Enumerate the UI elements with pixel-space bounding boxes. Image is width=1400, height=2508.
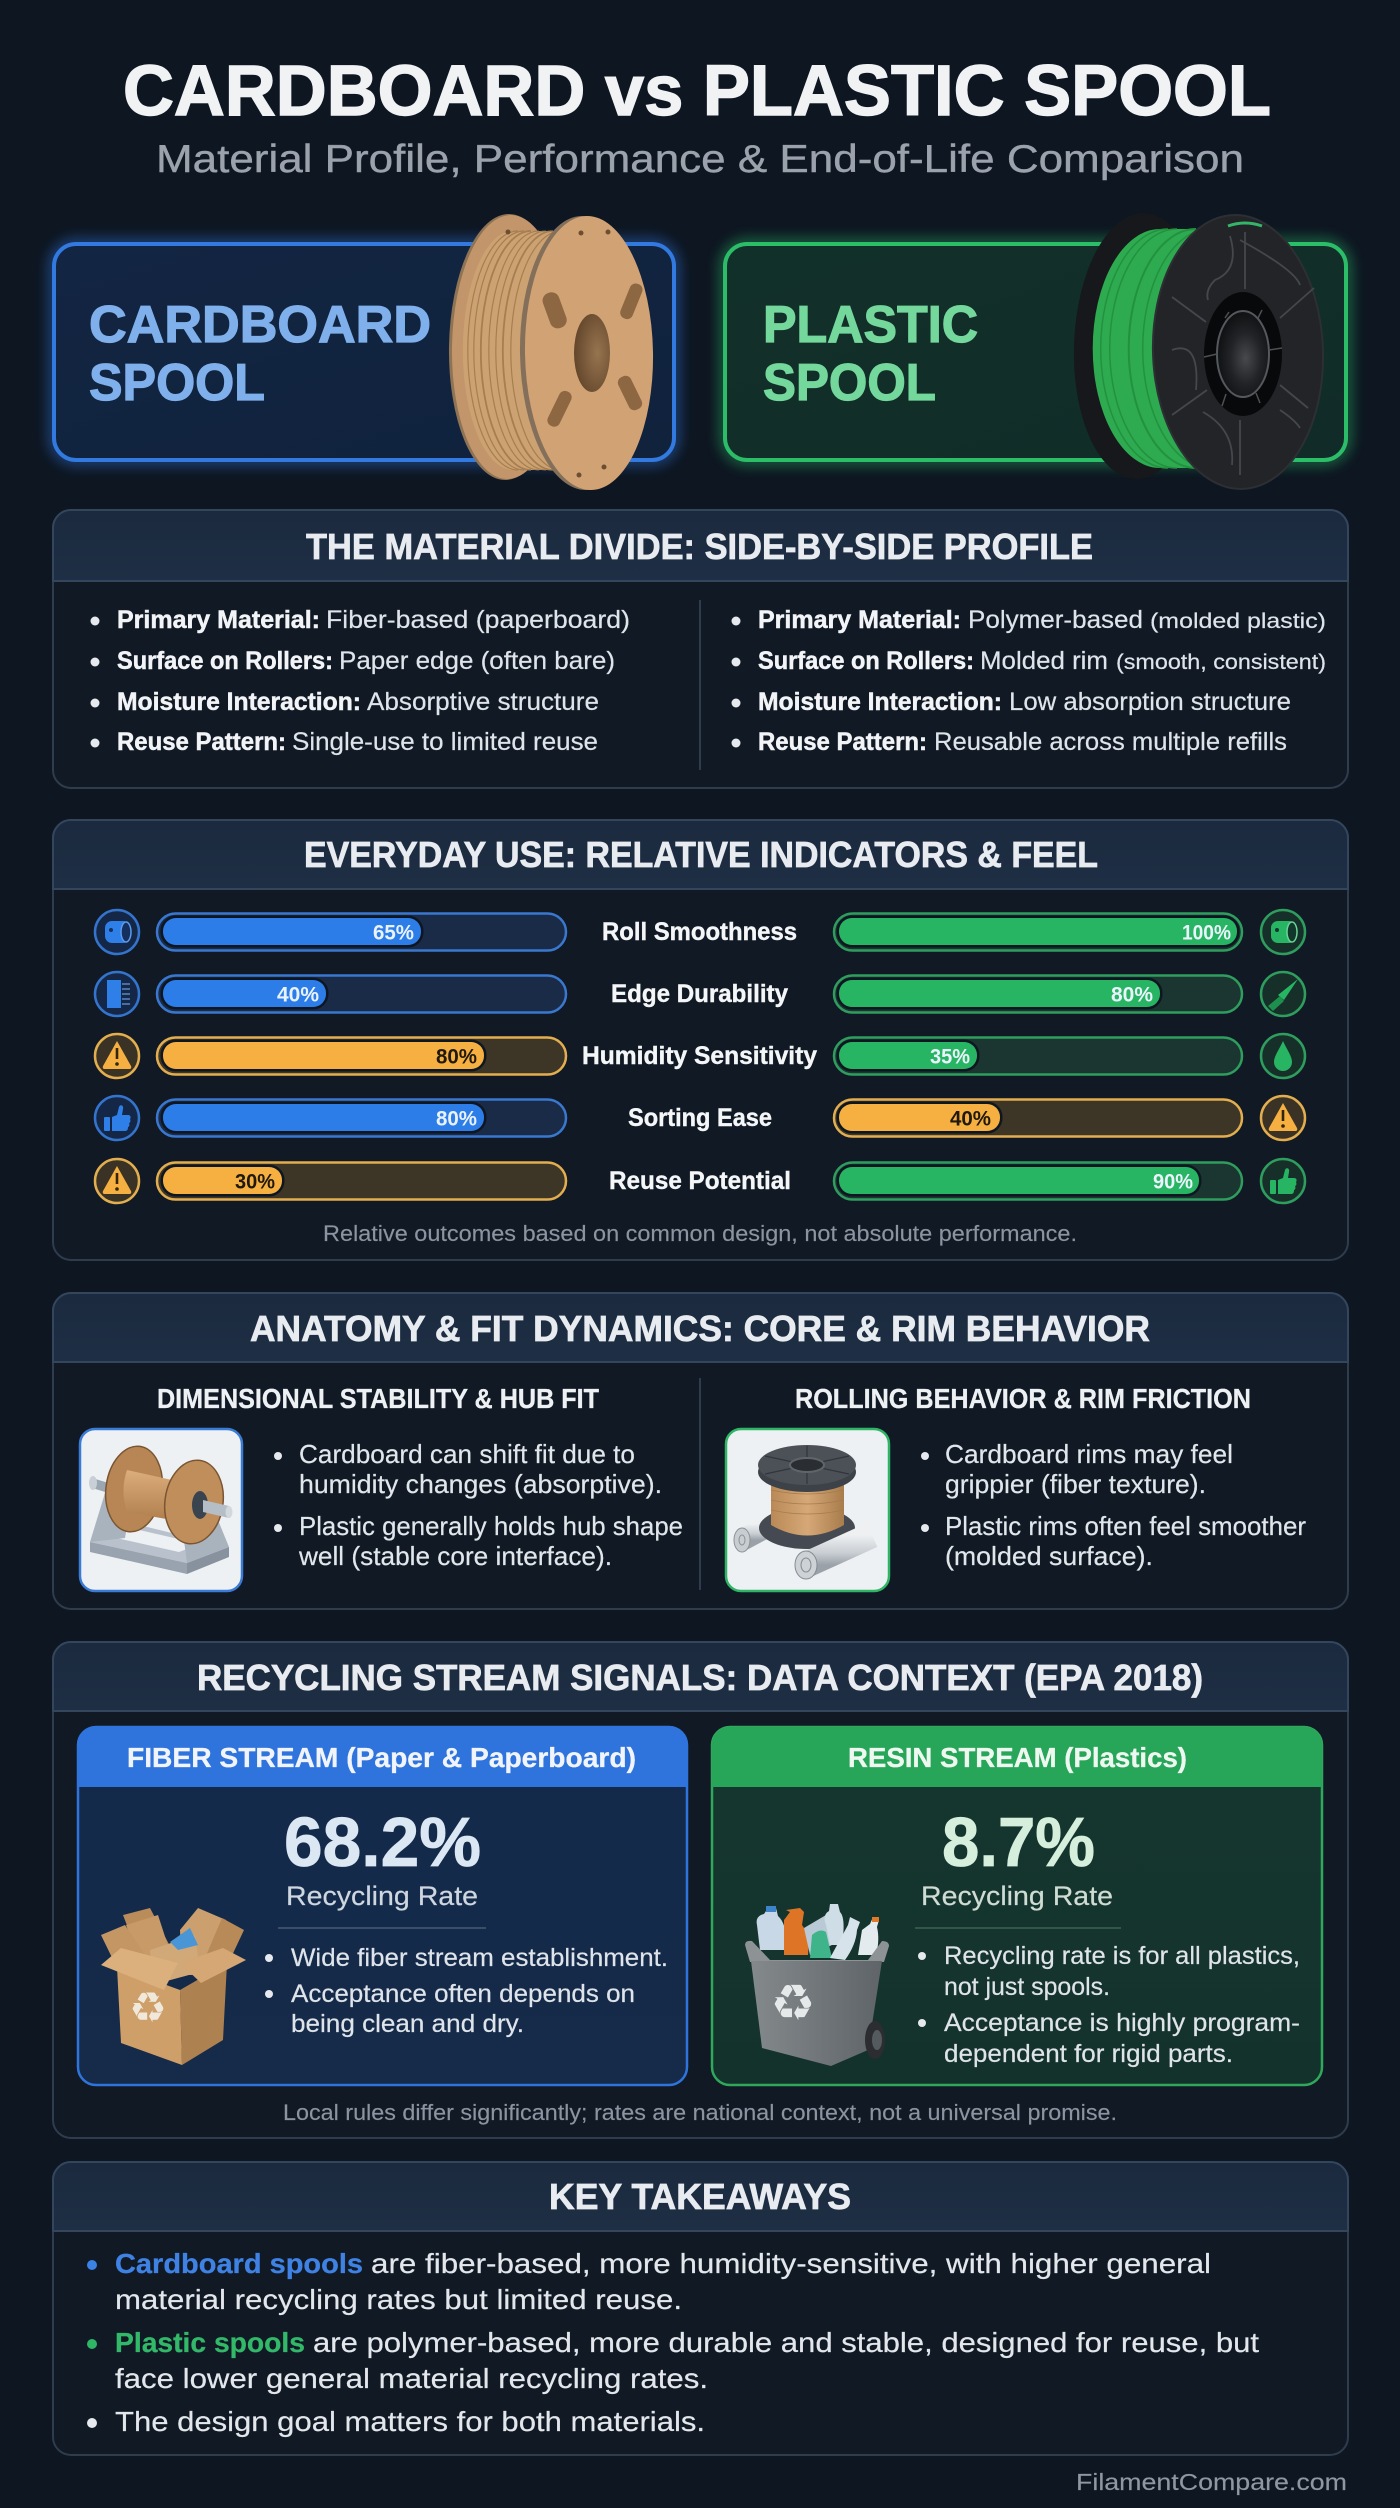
card label: cardboard spool: CARDBOARD: [89, 296, 431, 354]
text: rolling bullets: Plastic rims often feel smoother: [945, 1511, 1306, 1541]
list: cardboard profile: [90, 606, 630, 756]
icon: cardboard box: ♻: [129, 1983, 167, 2032]
panel: material divide: [53, 510, 1348, 788]
list: cardboard profile: Reuse Pattern:: [117, 728, 286, 756]
takeaway: cardboard: material recycling rates but limited reuse.: [115, 2284, 682, 2315]
list: plastic profile: (smooth, consistent): [1116, 651, 1326, 674]
text: dimensional bullets: well (stable core interface).: [298, 1541, 612, 1571]
text: dimensional bullets: [274, 1439, 683, 1571]
row: sorting ease: Sorting Ease: [628, 1104, 772, 1132]
card: fiber stream: [78, 1727, 687, 2085]
takeaway: plastic: [87, 2327, 1259, 2394]
list: plastic profile: Moisture Interaction:: [758, 688, 1002, 716]
takeaway: design goal: The design goal matters for both materials.: [115, 2406, 705, 2437]
text: fiber bullets: [265, 1944, 668, 2038]
row: edge durability: 40%: [277, 984, 319, 1006]
heading: key takeaways: KEY TAKEAWAYS: [549, 2176, 851, 2217]
card label: plastic spool: [763, 296, 978, 412]
text: fiber bullets: being clean and dry.: [291, 2010, 524, 2038]
image: spool on hub stand: [80, 1429, 242, 1591]
card: resin stream: RESIN STREAM (Plastics): [848, 1742, 1187, 1773]
row: reuse potential: 90%: [1153, 1170, 1193, 1194]
heading: anatomy: ANATOMY & FIT DYNAMICS: CORE & RIM BEHAVIOR: [250, 1308, 1150, 1349]
image: cardboard spool: [447, 213, 655, 491]
panel: plastic spool card: [725, 211, 1346, 492]
subheading: rolling behavior: ROLLING BEHAVIOR & RIM FRICTION: [795, 1383, 1251, 1414]
list: cardboard profile: Surface on Rollers:: [117, 647, 333, 675]
card label: plastic spool: PLASTIC: [763, 296, 978, 354]
text: dimensional bullets: Cardboard can shift fit due to: [299, 1439, 635, 1469]
takeaway: plastic: Plastic spools: [115, 2327, 305, 2358]
text: resin bullets: Acceptance is highly program-: [944, 2009, 1300, 2037]
list: plastic profile: Molded rim: [980, 647, 1108, 675]
icon: cardboard box: [101, 1908, 246, 2065]
icon: recycling bin: ♻: [771, 1974, 815, 2032]
takeaway: cardboard: Cardboard spools: [115, 2248, 363, 2279]
list: cardboard profile: Primary Material:: [117, 606, 320, 634]
list: cardboard profile: Absorptive structure: [367, 688, 599, 716]
row: edge durability: [95, 972, 1305, 1016]
title: CARDBOARD vs PLASTIC SPOOL: [123, 52, 1271, 131]
takeaway: cardboard: [87, 2248, 1211, 2315]
heading: everyday use: EVERYDAY USE: RELATIVE INDICATORS & FEEL: [304, 834, 1098, 875]
row: roll smoothness: 100%: [1182, 922, 1231, 944]
list: plastic profile: Low absorption structure: [1009, 688, 1291, 716]
icon: recycling bin: [745, 1904, 889, 2066]
text: resin bullets: [918, 1942, 1300, 2068]
caption: relative outcomes: Relative outcomes based on common design, not absolute performance.: [323, 1221, 1077, 1246]
panel: anatomy and fit: [53, 1293, 1348, 1609]
row: edge durability: 80%: [1111, 984, 1153, 1006]
row: humidity sensitivity: 80%: [436, 1046, 477, 1068]
panel: cardboard spool card: [54, 213, 674, 491]
list: cardboard profile: Paper edge (often bare): [339, 647, 615, 675]
stat: 8.7%: 8.7%: [942, 1803, 1095, 1881]
text: fiber bullets: Wide fiber stream establishment.: [291, 1944, 668, 1972]
list: plastic profile: [732, 606, 1326, 756]
list: plastic profile: Surface on Rollers:: [758, 647, 974, 675]
subtitle: Material Profile, Performance & End-of-Life Comparison: [156, 138, 1244, 181]
heading: recycling: RECYCLING STREAM SIGNALS: DATA CONTEXT (EPA 2018): [197, 1657, 1203, 1698]
stat label: Recycling Rate: [286, 1881, 478, 1911]
row: sorting ease: [95, 1096, 1305, 1140]
takeaway: plastic: are polymer-based, more durable and stable, designed for reuse, but: [313, 2327, 1259, 2358]
row: roll smoothness: 65%: [373, 922, 414, 944]
heading: material divide: THE MATERIAL DIVIDE: SIDE-BY-SIDE PROFILE: [306, 526, 1093, 567]
row: humidity sensitivity: Humidity Sensitivity: [582, 1042, 817, 1070]
text: dimensional bullets: Plastic generally holds hub shape: [299, 1511, 683, 1541]
list: cardboard profile: Moisture Interaction:: [117, 688, 361, 716]
caption: local rules: Local rules differ significantly; rates are national context, not a universal promise.: [283, 2100, 1117, 2125]
row: edge durability: Edge Durability: [611, 980, 788, 1008]
text: resin bullets: Recycling rate is for all plastics,: [944, 1942, 1300, 1970]
row: humidity sensitivity: [95, 1034, 1305, 1078]
takeaway: cardboard: are fiber-based, more humidity-sensitive, with higher general: [371, 2248, 1211, 2279]
panel: recycling stream: [53, 1642, 1348, 2138]
row: reuse potential: 30%: [235, 1170, 275, 1194]
list: plastic profile: Reusable across multiple refills: [934, 728, 1287, 756]
text: resin bullets: dependent for rigid parts.: [944, 2040, 1233, 2068]
row: roll smoothness: Roll Smoothness: [602, 918, 797, 946]
text: fiber bullets: Acceptance often depends on: [291, 1980, 635, 2008]
list: plastic profile: Primary Material:: [758, 606, 961, 634]
list: cardboard profile: Fiber-based (paperboard): [326, 606, 630, 634]
stat label: Recycling Rate: [921, 1881, 1113, 1911]
image: plastic spool: [1069, 211, 1328, 492]
card label: plastic spool: SPOOL: [763, 354, 936, 412]
list: cardboard profile: Single-use to limited reuse: [292, 728, 598, 756]
text: resin bullets: not just spools.: [944, 1973, 1110, 2001]
card: fiber stream: FIBER STREAM (Paper & Paperboard): [127, 1742, 636, 1773]
row: reuse potential: [95, 1159, 1305, 1203]
card: resin stream: [712, 1727, 1322, 2085]
image: spool on rollers: [726, 1429, 889, 1591]
panel: key takeaways: [53, 2162, 1348, 2455]
footer: source: FilamentCompare.com: [1076, 2469, 1347, 2495]
stat: 68.2%: 68.2%: [284, 1803, 481, 1881]
panel: everyday use: [53, 820, 1348, 1260]
list: plastic profile: (molded plastic): [1150, 610, 1326, 633]
text: rolling bullets: (molded surface).: [945, 1541, 1153, 1571]
row: sorting ease: 80%: [436, 1108, 477, 1130]
text: rolling bullets: [921, 1439, 1306, 1571]
text: rolling bullets: Cardboard rims may feel: [945, 1439, 1233, 1469]
row: reuse potential: Reuse Potential: [609, 1167, 791, 1195]
row: roll smoothness: [95, 910, 1305, 954]
list: plastic profile: Polymer-based: [968, 606, 1143, 634]
text: dimensional bullets: humidity changes (absorptive).: [299, 1469, 662, 1499]
subheading: dimensional stability: DIMENSIONAL STABILITY & HUB FIT: [157, 1383, 599, 1414]
row: sorting ease: 40%: [950, 1108, 991, 1130]
card label: cardboard spool: [89, 296, 431, 412]
text: rolling bullets: grippier (fiber texture).: [945, 1469, 1206, 1499]
row: humidity sensitivity: 35%: [930, 1046, 970, 1068]
takeaway: plastic: face lower general material recycling rates.: [115, 2363, 708, 2394]
list: plastic profile: Reuse Pattern:: [758, 728, 927, 756]
card label: cardboard spool: SPOOL: [89, 354, 265, 412]
